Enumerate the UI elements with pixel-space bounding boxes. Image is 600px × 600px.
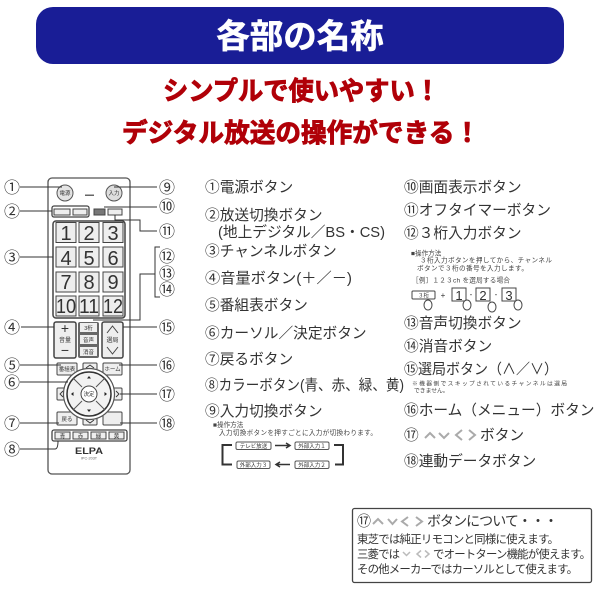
color buttons: 赤 [78, 432, 84, 440]
button list: column 1: ⑤番組表ボタン [205, 297, 308, 314]
broadcast and function buttons [52, 206, 122, 217]
three-digit input instructions: ボタンで３桁の番号を入力します。 [417, 264, 528, 272]
subtitle [122, 76, 480, 148]
button list: column 2: ⑱連動データボタン [404, 452, 536, 470]
three-digit input instructions [411, 248, 552, 312]
key press illustration: - [495, 290, 498, 299]
number keypad: 12 [103, 296, 123, 318]
number keypad: 1 [60, 223, 72, 245]
button list: column 1: ⑥カーソル／決定ボタン [205, 325, 367, 342]
number keypad: 7 [60, 272, 72, 294]
left callout numbers: ⑤ [4, 357, 20, 375]
navigation buttons: 戻る [61, 416, 73, 423]
subtitle: デジタル放送の操作ができる！ [122, 118, 480, 148]
volume, function and channel buttons: 音量 [59, 336, 71, 344]
title banner [36, 7, 564, 64]
button list: column 2: ⑭消音ボタン [404, 338, 492, 355]
input switching instructions: 外部入力２ [298, 461, 326, 469]
volume, function and channel buttons: − [61, 342, 69, 358]
left callout numbers: ① [4, 179, 20, 197]
left callout numbers: ② [4, 203, 20, 221]
power and input buttons [57, 185, 122, 201]
number keypad: 6 [107, 248, 119, 270]
right callout numbers: ⑯ [159, 357, 175, 375]
right callout numbers [159, 179, 175, 433]
three-digit input instructions: ３桁入力ボタンを押してから、チャンネル [420, 256, 552, 264]
right callout numbers: ⑮ [159, 319, 175, 337]
number keypad: 10 [56, 296, 76, 318]
navigation buttons [57, 363, 122, 425]
key press illustration: 3 [505, 288, 513, 303]
color buttons: 黄 [114, 432, 120, 440]
channel skip note: ※機器側でスキップされているチャンネルは選局 [412, 380, 567, 388]
input switching instructions: 外部入力３ [240, 461, 267, 469]
key press illustration: ３桁 [418, 292, 429, 300]
channel skip note [412, 380, 567, 394]
input switching instructions: 外部入力１ [298, 442, 326, 450]
button list: column 2: ボタン [480, 427, 524, 444]
number keypad: 11 [79, 296, 99, 318]
button list: column 1: ⑧カラーボタン(青、赤、緑、黄) [205, 377, 404, 394]
number keypad: 9 [107, 272, 119, 294]
number keypad: 4 [60, 248, 72, 270]
volume, function and channel buttons: 選局 [106, 336, 119, 344]
right callout numbers: ⑩ [159, 198, 175, 216]
color buttons [52, 430, 127, 441]
note box [352, 508, 592, 582]
number keypad: 2 [83, 223, 95, 245]
key press illustration: - [470, 290, 473, 299]
brand logo: IPC-203T [81, 456, 98, 460]
right callout numbers: ⑱ [159, 415, 175, 433]
button list: column 1: (地上デジタル／BS・CS) [218, 223, 385, 241]
volume, function and channel buttons: 消音 [83, 348, 94, 356]
input switching instructions: 入力切換ボタンを押すごとに入力が切換わります。 [219, 428, 377, 437]
right callout numbers: ⑬ [159, 265, 175, 283]
button list: column 2: ⑰ [404, 427, 419, 444]
input switching instructions: テレビ放送 [240, 442, 268, 450]
number keypad: 3 [107, 223, 119, 245]
remote body [48, 178, 130, 474]
button list: column 2: ⑪オフタイマーボタン [404, 202, 551, 219]
left callout numbers: ⑥ [4, 374, 20, 392]
key press illustration: + [441, 291, 446, 300]
button list: column 2 [404, 179, 594, 470]
color buttons: 青 [60, 432, 66, 440]
left callout numbers [4, 179, 20, 459]
left callout numbers: ④ [4, 319, 20, 337]
right callout numbers: ⑫ [159, 248, 175, 266]
chevrons [425, 430, 475, 440]
button list: column 2: ⑯ホーム（メニュー）ボタン [404, 402, 594, 419]
button list: column 1: ①電源ボタン [205, 179, 293, 196]
volume, function and channel buttons: + [61, 320, 69, 336]
three-digit input instructions: ［例］１２３ch を選局する場合 [412, 276, 510, 284]
directional pad [64, 368, 114, 420]
title banner: 各部の名称 [216, 19, 384, 56]
right callout numbers: ⑰ [159, 386, 175, 404]
brand logo [75, 446, 103, 460]
button list: column 1 [205, 179, 404, 420]
left callout numbers: ⑧ [4, 441, 20, 459]
button list: column 1: ②放送切換ボタン [205, 207, 323, 224]
input switching instructions: ■操作方法 [213, 420, 244, 429]
button list: column 2: ⑬音声切換ボタン [404, 314, 522, 332]
leader lines [20, 187, 160, 449]
three-digit input instructions: ■操作方法 [411, 248, 442, 258]
power and input buttons: 入力 [108, 189, 120, 197]
button list: column 1: ⑦戻るボタン [205, 351, 293, 368]
right callout numbers: ⑭ [159, 281, 175, 299]
volume, function and channel buttons: 3桁 [84, 324, 93, 332]
button list: column 1: ⑨入力切換ボタン [205, 403, 323, 420]
right callout numbers: ⑨ [159, 179, 175, 197]
brand logo: ELPA [75, 446, 103, 457]
note box: ボタンについて・・・ [427, 513, 558, 529]
volume, function and channel buttons: 音声 [83, 336, 94, 344]
note box: 東芝では純正リモコンと同様に使えます。 [357, 532, 559, 546]
directional pad: 決定 [83, 390, 95, 398]
navigation buttons: ホーム [104, 366, 121, 373]
remote control diagram [48, 178, 130, 474]
left callout numbers: ⑦ [4, 415, 20, 433]
button list: column 2: ⑫３桁入力ボタン [404, 225, 522, 242]
note box: ⑰ [357, 513, 371, 529]
flow arrows [222, 443, 343, 467]
navigation buttons: 番組表 [59, 365, 76, 373]
channel skip note: できません。 [414, 388, 449, 394]
button list: column 2: ⑮選局ボタン（∧／∨） [404, 361, 558, 378]
volume, function and channel buttons [54, 320, 123, 358]
button list: column 1: ③チャンネルボタン [205, 243, 337, 260]
key press illustration: 1 [455, 288, 463, 303]
note box: 三菱では [357, 548, 400, 561]
button list: column 1: ④音量ボタン(＋／－) [205, 270, 352, 287]
left callout numbers: ③ [4, 249, 20, 267]
input switching instructions [213, 420, 377, 469]
number keypad: 5 [83, 248, 95, 270]
key press illustration: 2 [479, 288, 487, 303]
color buttons: 緑 [96, 432, 102, 440]
subtitle: シンプルで使いやすい！ [163, 76, 440, 106]
button list: column 2: ⑩画面表示ボタン [404, 179, 522, 196]
number keypad [53, 221, 125, 318]
right callout numbers: ⑪ [159, 223, 175, 241]
key press illustration [412, 288, 522, 312]
power and input buttons: 電源 [59, 189, 71, 197]
note box: その他メーカーではカーソルとして使えます。 [357, 562, 578, 576]
number keypad: 8 [83, 272, 95, 294]
note box: でオートターン機能が使えます。 [433, 547, 591, 561]
